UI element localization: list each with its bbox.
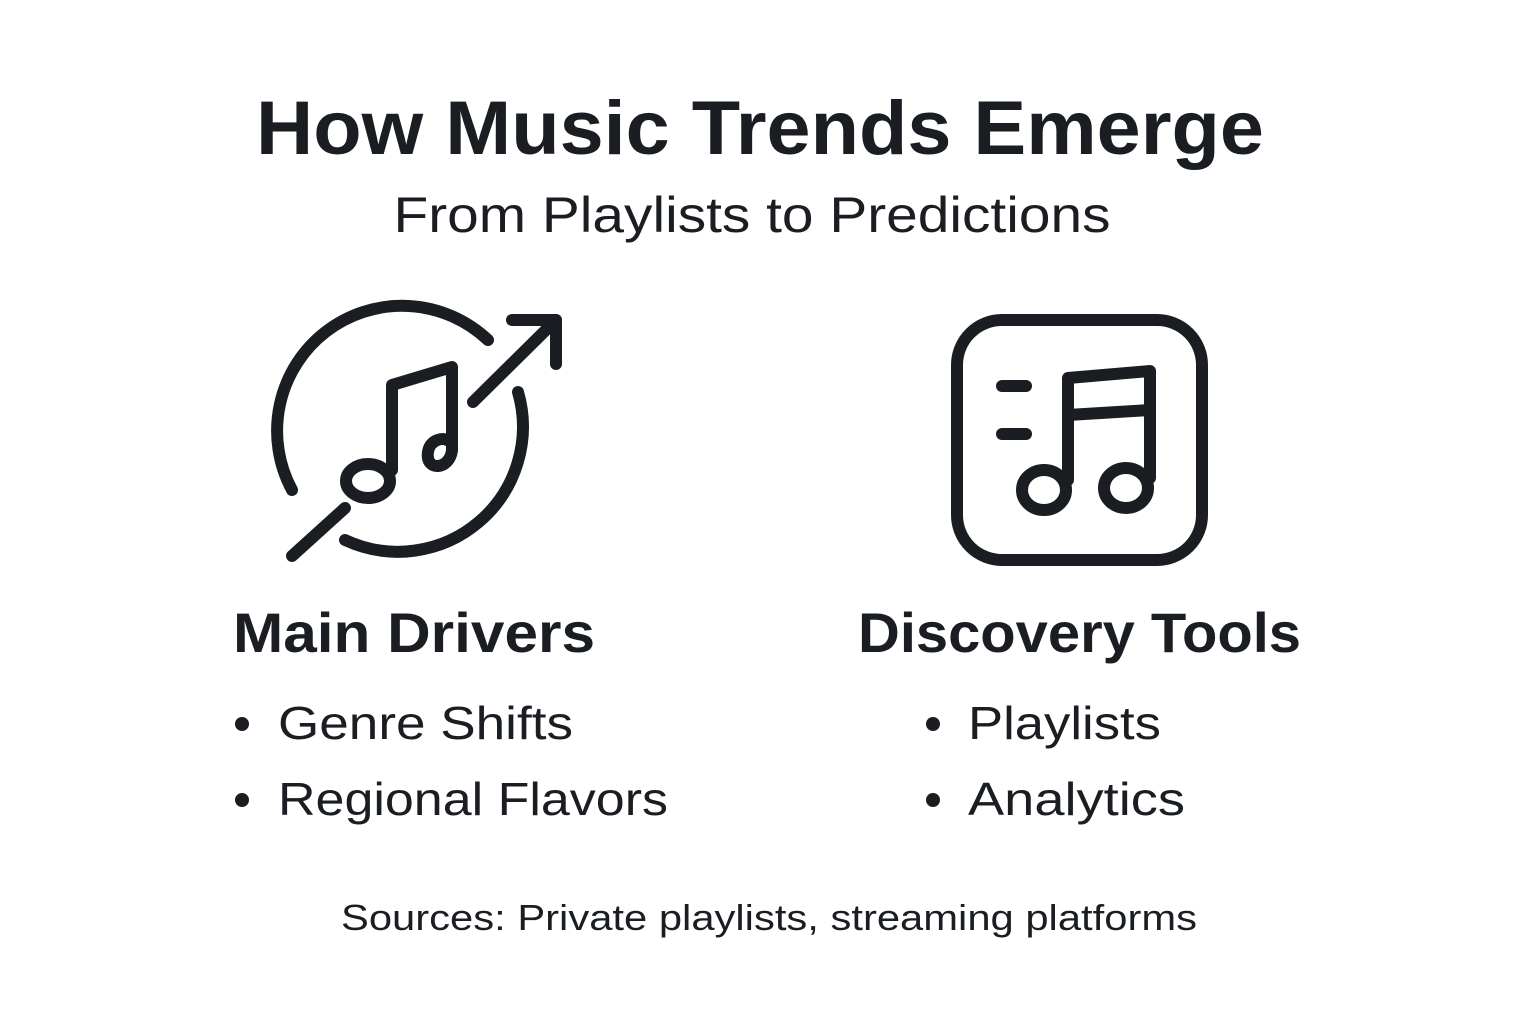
icon: music app bbox=[957, 320, 1202, 560]
list: discovery tools bbox=[926, 697, 1185, 825]
list: main drivers: Regional Flavors bbox=[278, 773, 668, 825]
subtitle: From Playlists to Predictions bbox=[394, 187, 1110, 243]
heading: main drivers: Main Drivers bbox=[233, 601, 595, 664]
heading: discovery tools: Discovery Tools bbox=[858, 601, 1301, 664]
list: main drivers bbox=[235, 697, 668, 825]
sources footnote: Sources: Private playlists, streaming platforms bbox=[341, 897, 1197, 938]
list: discovery tools: Analytics bbox=[968, 773, 1185, 825]
icon: trending music note bbox=[277, 306, 556, 556]
list: discovery tools: Playlists bbox=[968, 697, 1161, 749]
title: How Music Trends Emerge bbox=[256, 86, 1264, 171]
list: main drivers: Genre Shifts bbox=[278, 697, 573, 749]
